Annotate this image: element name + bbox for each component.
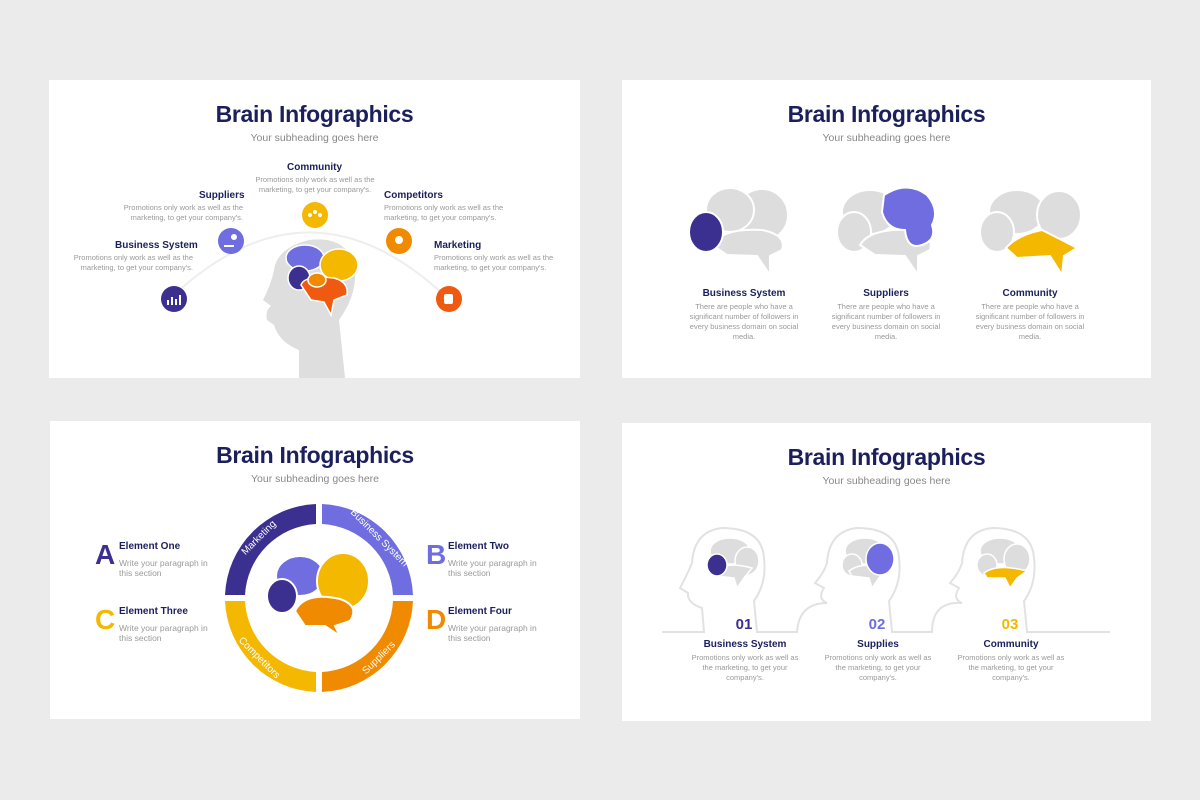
text: community: There are people who have a significant number of followers in every business domain on social media.: [976, 302, 1084, 341]
panel: top-left head arc: Promotions only work as well as the marketing, to get your company's.: [74, 253, 193, 272]
subheading: Your subheading goes here: [822, 132, 951, 144]
head silhouette: [263, 239, 355, 378]
icon: competitors: [386, 228, 412, 254]
brain 1: [689, 188, 788, 275]
icon: community: [302, 202, 328, 228]
ring chart: Competitors: [236, 635, 282, 681]
text 1: [692, 639, 798, 682]
text: business system: There are people who have a significant number of followers in every business domain on social media.: [690, 302, 798, 341]
panel: bottom-left ring: Write your paragraph in this section: [119, 558, 208, 578]
text: community: [255, 162, 375, 194]
numbers: 01: [736, 616, 752, 633]
brain 2: [837, 188, 935, 275]
text 1: Promotions only work as well as the marketing, to get your company's.: [692, 653, 798, 682]
subheading: Your subheading goes here: [250, 132, 379, 144]
panel: bottom-left ring: Element Four: [448, 606, 512, 617]
ring chart: Marketing: [240, 519, 279, 558]
text 3: Community: [984, 639, 1038, 650]
text: community: Community: [1002, 288, 1058, 299]
letters: A: [95, 539, 115, 570]
panel: bottom-left ring: [50, 421, 580, 719]
panel: top-left head arc: Promotions only work as well as the marketing, to get your company's.: [384, 203, 503, 222]
element four: [448, 606, 537, 643]
ring chart: Suppliers: [360, 639, 398, 677]
panel: top-left head arc: Community: [287, 162, 342, 173]
text 2: Supplies: [857, 639, 899, 650]
panel: top-left head arc: Promotions only work as well as the marketing, to get your company's.: [255, 175, 375, 194]
element one: [119, 541, 208, 578]
subheading: Your subheading goes here: [251, 473, 379, 485]
panel: top-left head arc: Promotions only work as well as the marketing, to get your company's.: [124, 203, 243, 222]
panel: bottom-left ring: C: [95, 604, 115, 635]
panel: bottom-right heads: [622, 423, 1151, 721]
title: Brain Infographics: [788, 101, 985, 127]
text 3: [958, 639, 1064, 682]
text 1: Business System: [704, 639, 786, 650]
element two: [448, 541, 537, 578]
panel: bottom-right heads: 02: [869, 616, 885, 633]
panel: top-left head arc: Marketing: [434, 240, 481, 251]
panel: bottom-left ring: Write your paragraph in this section: [448, 623, 537, 643]
brain 1: [707, 538, 759, 588]
panel: top-left head arc: Business System: [115, 240, 198, 251]
ring chart: [225, 504, 413, 692]
title: Brain Infographics: [788, 444, 985, 470]
ring chart: Business System: [348, 507, 410, 569]
text 2: Promotions only work as well as the marketing, to get your company's.: [825, 653, 931, 682]
element three: [119, 606, 208, 643]
panel: top-right three brains: [622, 80, 1151, 378]
panel: bottom-left ring: Element One: [119, 541, 180, 552]
text: business system: [74, 240, 198, 272]
icon: business system: [161, 286, 187, 312]
panel: top-left head arc: Promotions only work as well as the marketing, to get your company's.: [434, 253, 553, 272]
panel: bottom-left ring: B: [426, 539, 446, 570]
text: suppliers: Suppliers: [863, 288, 909, 299]
panel: top-left head arc: Suppliers: [199, 190, 245, 201]
brain 3: [980, 190, 1081, 275]
panel: top-left head arc: [49, 80, 580, 378]
icon: suppliers: [218, 228, 244, 254]
panel: top-left head arc: Competitors: [384, 190, 443, 201]
text 2: [825, 639, 932, 682]
panel: bottom-left ring: D: [426, 604, 446, 635]
panel: bottom-left ring: Element Two: [448, 541, 509, 552]
panel: bottom-right heads: 03: [1002, 616, 1018, 633]
text 3: Promotions only work as well as the marketing, to get your company's.: [958, 653, 1064, 682]
brain colored: [267, 553, 369, 636]
panel: bottom-left ring: Write your paragraph in this section: [119, 623, 208, 643]
text: marketing: [434, 240, 553, 272]
panel: bottom-left ring: Element Three: [119, 606, 188, 617]
brain 2: [842, 538, 894, 588]
brain 3: [977, 538, 1030, 588]
subheading: Your subheading goes here: [822, 475, 951, 487]
text: competitors: [384, 190, 503, 222]
text: suppliers: [124, 190, 245, 222]
text: business system: Business System: [703, 288, 785, 299]
title: Brain Infographics: [216, 101, 413, 127]
icon: marketing: [436, 286, 462, 312]
brain colored: [286, 245, 358, 315]
panel: bottom-left ring: Write your paragraph in this section: [448, 558, 537, 578]
text: suppliers: There are people who have a significant number of followers in every business domain on social media.: [832, 302, 940, 341]
title: Brain Infographics: [216, 442, 414, 468]
